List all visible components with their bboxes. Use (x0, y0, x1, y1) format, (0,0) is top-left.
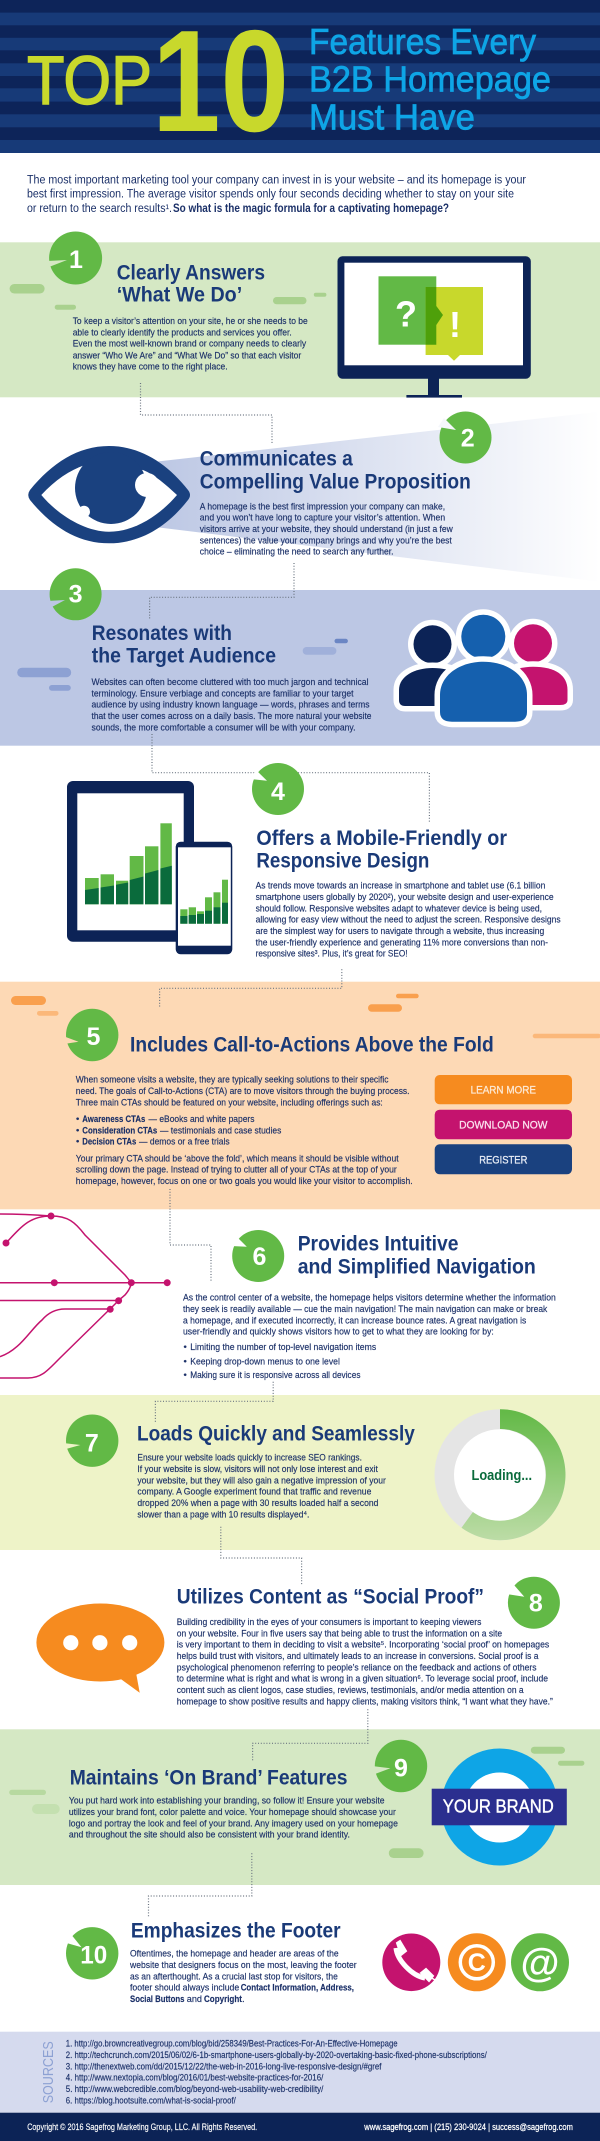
sources list: 4. http://www.nextopia.com/blog/2016/01/best-website-practices-for-2016/ (66, 2073, 324, 2084)
body text 5: Decision CTAs (82, 1137, 136, 1148)
body text 6: a homepage, and if executed incorrectly, it can increase bounce rates. A great navigation is (183, 1315, 527, 1326)
number badge 1: 1 (69, 246, 83, 274)
body text 2: sentences) the value your company brings and why you’re the best (200, 535, 452, 546)
header banner (0, 0, 600, 162)
body text 2: choice – eliminating the need to search any further. (200, 547, 394, 558)
heading 4: Responsive Design (256, 850, 429, 873)
body text 7: company. A Google experiment found that traffic and revenue (137, 1487, 371, 1498)
body text 9 (69, 1796, 398, 1841)
number badge 5: 5 (86, 1023, 100, 1051)
body text 5: — eBooks and white papers (148, 1114, 255, 1125)
panel: 8 content as social proof (36, 1577, 560, 1707)
body text 7: dropped 20% when a page with 30 results loaded half a second (137, 1498, 378, 1509)
body text 6: • (184, 1356, 187, 1367)
heading 4 (256, 827, 507, 873)
body text 2: and you won’t have long to capture your visitor’s attention. When (200, 513, 445, 524)
body text 4 (256, 881, 561, 960)
icon: at sign (511, 1933, 569, 1991)
body text 10: footer should always include (130, 1983, 239, 1994)
chart: loading donut (434, 1409, 566, 1540)
body text 5: Your primary CTA should be ‘above the fold’, which means it should be visible without (76, 1153, 399, 1164)
body text 4: should follow. Responsive websites adapt to whatever device is being used, (256, 903, 542, 914)
heading 2: Compelling Value Proposition (200, 470, 471, 493)
body text 5: When someone visits a website, they are typically seeking solutions to their specific (76, 1075, 389, 1086)
heading 6: Provides Intuitive (298, 1233, 458, 1256)
number badge 2: 2 (461, 425, 475, 453)
body text 8: homepage to show positive results and happy clients, making visitors think, “I want what they have.” (177, 1696, 553, 1707)
body text 3: sounds, the more comfortable a consumer will be with your company. (92, 722, 356, 733)
body text 7: Ensure your website loads quickly to increase SEO rankings. (137, 1453, 362, 1464)
body text 2: A homepage is the best first impression your company can make, (200, 501, 445, 512)
body text 1: To keep a visitor’s attention on your site, he or she needs to be (73, 316, 308, 327)
sources list: 5. http://www.webcredible.com/blog/beyond-web-usability-web-credibility/ (66, 2084, 324, 2095)
body text 8: content such as client logos, case studies, reviews, testimonials, and/or media attention on a (177, 1685, 524, 1696)
title: Top 10: TOP (27, 42, 152, 119)
sources list: 2. http://techcrunch.com/2015/06/02/6-1b-smartphone-users-globally-by-2020-overtaking-basic-fixed-phone-subscriptions/ (66, 2050, 487, 2061)
body text 4: allowing for easy view without the need to adjust the screen. Responsive designs (256, 915, 561, 926)
body text 8: on your website. Four in five users say that being able to trust the information on a site (177, 1628, 502, 1639)
heading 6: and Simplified Navigation (298, 1255, 536, 1278)
footer bar: Copyright © 2016 Sagefrog Marketing Group, LLC. All Rights Reserved. (27, 2122, 257, 2132)
panel: 7 loads quickly and seamlessly (0, 1382, 600, 1585)
panel: 1 clearly answers what we do (0, 232, 600, 443)
body text 6: As the control center of a website, the homepage helps visitors determine whether the information (183, 1293, 556, 1304)
body text 8: psychological phenomenon referring to people’s reliance on the feedback and actions of others (177, 1662, 537, 1673)
body text 6: Limiting the number of top-level navigation items (190, 1342, 376, 1353)
body text 4: responsive sites³. Plus, it’s great for SEO! (256, 949, 408, 960)
number badge 5 (63, 1009, 118, 1061)
body text 5 (76, 1075, 413, 1187)
body text 10: website that designers focus on the most, leaving the footer (129, 1960, 357, 1971)
panel: 3 resonates with the target audience (0, 563, 600, 822)
panel: 10 emphasizes the footer (63, 1920, 569, 2005)
body text 3: that the user comes across on a daily basis. The more natural your website (92, 711, 372, 722)
heading 3: Resonates with (92, 622, 232, 645)
title: Top 10: 10 (152, 0, 289, 162)
body text 7: slower than a page with 10 results displayed⁴. (137, 1509, 309, 1520)
heading 4: Offers a Mobile-Friendly or (256, 827, 507, 850)
number badge 1 (47, 232, 102, 284)
number badge 3 (47, 568, 102, 620)
chart: loading donut: Loading... (472, 1467, 532, 1484)
body text 5: • (76, 1125, 79, 1136)
body text 1 (73, 316, 308, 373)
intro text: So what is the magic formula for a captivating homepage? (173, 203, 449, 215)
body text 10: Copyright (204, 1994, 243, 2005)
icon: at sign: @ (520, 1941, 560, 1985)
body text 2: visitors arrive at your website, they should understand (in just a few (200, 524, 453, 535)
body text 6: • (184, 1342, 187, 1353)
body text 8: Building credibility in the eyes of your consumers is important to keeping viewers (177, 1617, 482, 1628)
body text 10: Social Buttons (130, 1994, 184, 2005)
body text 5: Consideration CTAs (82, 1125, 157, 1136)
body text 6 (183, 1293, 556, 1381)
heading 9: Maintains ‘On Brand’ Features (70, 1766, 347, 1789)
body text 1: answer “Who We Are” and “What We Do” so that each visitor (73, 350, 301, 361)
body text 5: — testimonials and case studies (160, 1125, 282, 1136)
body text 4: smartphone users globally by 2020²), your website design and user-experience (256, 892, 554, 903)
number badge 4: 4 (271, 778, 285, 806)
body text 5: — demos or a free trials (139, 1137, 230, 1148)
button: download now (435, 1110, 572, 1139)
icon: speech bubble (36, 1604, 164, 1693)
icon: monitor with speech bubbles: ! (449, 304, 461, 345)
body text 8: is very important to them in deciding to visit a website⁵. Incorporating ‘social proof’ on homepages (177, 1640, 549, 1651)
button: learn more: LEARN MORE (471, 1084, 536, 1096)
body text 9: You put hard work into establishing your branding, so follow it! Ensure your website (69, 1796, 385, 1807)
title: features every B2B homepage must have (309, 21, 551, 137)
number badge 6 (231, 1230, 284, 1282)
body text 3: terminology. Ensure verbiage and concepts are familiar to your target (92, 688, 354, 699)
body text 10: Contact Information, Address, (241, 1983, 354, 1994)
body text 6: Making sure it is responsive across all devices (190, 1370, 361, 1381)
body text 6: user-friendly and quickly shows visitors how to get to what they are looking for by: (183, 1327, 494, 1338)
button: download now: DOWNLOAD NOW (459, 1119, 548, 1131)
body text 3 (92, 677, 372, 733)
number badge 2 (438, 412, 492, 464)
icon: your brand roundel (432, 1748, 567, 1866)
heading 6 (298, 1233, 536, 1278)
intro text: or return to the search results¹. (27, 203, 172, 215)
body text 5: scrolling down the page. Instead of trying to clutter all of your CTAs at the top of your (76, 1165, 397, 1176)
sources list: 6. https://blog.hootsuite.com/what-is-social-proof/ (66, 2095, 236, 2106)
intro text (27, 174, 526, 215)
number badge 7: 7 (85, 1430, 99, 1458)
body text 5: • (76, 1137, 79, 1148)
button: register (435, 1144, 572, 1174)
icon: audience group (399, 615, 568, 722)
body text 10: . (242, 1994, 245, 2005)
body text 10 (129, 1949, 357, 2005)
body text 9: and throughout the site should also be consistent with your brand identity. (69, 1830, 350, 1841)
body text 7: If your website is slow, visitors will not only lose interest and exit (137, 1464, 378, 1475)
number badge 6: 6 (253, 1243, 266, 1271)
body text 6: • (184, 1370, 187, 1381)
number badge 10 (63, 1927, 118, 1980)
intro text: The most important marketing tool your company can invest in is your website – and its homepage is your (27, 174, 526, 186)
icon: eye (28, 446, 190, 543)
title: features every B2B homepage must have: Features Every (309, 21, 536, 62)
icon: monitor with speech bubbles (338, 256, 531, 398)
body text 5: need. The goals of Call-to-Actions (CTA) are to move visitors through the buying process. (76, 1086, 410, 1097)
body text 9: utilizes your brand font, color palette and voice. Your homepage should showcase your (69, 1807, 396, 1818)
body text 5: Awareness CTAs (82, 1114, 145, 1125)
title: features every B2B homepage must have: B2B Homepage (309, 58, 551, 99)
heading 1 (117, 261, 265, 307)
icon: copyright (448, 1933, 506, 1991)
body text 4: the user-friendly experience and generating 11% more conversions than non- (256, 937, 548, 948)
heading 5: Includes Call-to-Actions Above the Fold (130, 1034, 494, 1057)
footer bar (0, 2113, 600, 2141)
body text 8: helps build trust with visitors, and ultimately leads to an increase in conversions. Social proof is a (177, 1651, 539, 1662)
body text 8 (177, 1617, 553, 1707)
panel: 4 mobile-friendly or responsive design (67, 763, 561, 960)
body text 7: your website, but they will also gain a negative impression of your (137, 1475, 386, 1486)
number badge 3: 3 (69, 581, 83, 609)
body text 10: and (187, 1994, 202, 2005)
body text 10: Oftentimes, the homepage and header are areas of the (130, 1949, 339, 1960)
heading 7: Loads Quickly and Seamlessly (137, 1423, 415, 1446)
panel: 6 intuitive and simplified navigation (0, 1212, 556, 1381)
icon: tablet and phone charts (67, 781, 232, 954)
body text 1: knows they have come to the right place. (73, 362, 228, 373)
panel: sources (0, 2032, 600, 2113)
body text 4: As trends move towards an increase in smartphone and tablet use (6.1 billion (256, 881, 545, 892)
sources list (66, 2039, 487, 2106)
panel: 9 on brand features (0, 1709, 600, 1917)
title: Top 10 (27, 0, 289, 162)
heading 2: Communicates a (200, 447, 353, 470)
body text 6: Keeping drop-down menus to one level (190, 1356, 340, 1367)
icon: phone (382, 1934, 440, 1991)
button: learn more (435, 1075, 572, 1104)
heading 3: the Target Audience (92, 645, 276, 668)
body text 7 (137, 1453, 386, 1520)
body text 5: • (76, 1114, 79, 1125)
number badge 10: 10 (80, 1941, 107, 1969)
title: features every B2B homepage must have: Must Have (309, 96, 475, 137)
number badge 9: 9 (394, 1755, 408, 1783)
sources list: 1. http://go.browncreativegroup.com/blog/bid/258349/Best-Practices-For-An-Effective-Homepage (66, 2039, 398, 2050)
icon: monitor with speech bubbles: ? (395, 294, 417, 335)
sources label: SOURCES (40, 2041, 57, 2103)
body text 4: are the simplest way for users to navigate through a website, thus increasing (256, 926, 544, 937)
panel: 5 call-to-actions above the fold (0, 969, 600, 1282)
heading 1: ‘What We Do’ (117, 284, 242, 307)
body text 10: as an afterthought. As a crucial last stop for visitors, the (130, 1971, 338, 1982)
button: register: REGISTER (479, 1154, 527, 1166)
body text 5: Three main CTAs should be featured on your website, including offerings such as: (76, 1097, 383, 1108)
panel: 2 communicates a compelling value proposition (28, 412, 600, 582)
body text 5: homepage, however, focus on one or two goals you would like your visitor to accomplish. (76, 1176, 413, 1187)
number badge 8: 8 (529, 1590, 543, 1618)
sources list: 3. http://thenextweb.com/dd/2015/12/22/the-web-in-2016-long-live-responsive-design/#gref (66, 2061, 382, 2072)
body text 2 (200, 501, 453, 558)
icon: navigation lines (0, 1212, 171, 1378)
body text 9: logo and portray the look and feel of your brand. Any imagery used on your homepage (69, 1818, 398, 1829)
body text 6: they seek is readily available — cue the main navigation! The main navigation can make or break (183, 1304, 548, 1315)
number badge 7 (63, 1414, 118, 1467)
icon: copyright: C (468, 1949, 486, 1977)
body text 3: Websites can often become cluttered with too much jargon and technical (92, 677, 368, 688)
number badge 9 (372, 1740, 427, 1792)
heading 1: Clearly Answers (117, 261, 265, 284)
heading 3 (92, 622, 276, 668)
number badge 8 (506, 1577, 560, 1629)
heading 2 (200, 447, 471, 493)
body text 8: to determine what is right and what is wrong in a given situation⁶. To leverage social proof, include (177, 1674, 548, 1685)
intro text: best first impression. The average visitor spends only four seconds deciding whether to stay on your site (27, 189, 514, 201)
body text 3: audience by using industry known language — words, phrases and terms (92, 700, 370, 711)
number badge 4 (250, 763, 304, 815)
body text 1: Even the most well-known brand or company needs to clearly (73, 339, 306, 350)
body text 1: able to clearly identify the products and services you offer. (73, 327, 292, 338)
heading 8: Utilizes Content as “Social Proof” (177, 1585, 484, 1608)
icon: your brand roundel: YOUR BRAND (443, 1796, 554, 1816)
heading 10: Emphasizes the Footer (131, 1920, 341, 1943)
